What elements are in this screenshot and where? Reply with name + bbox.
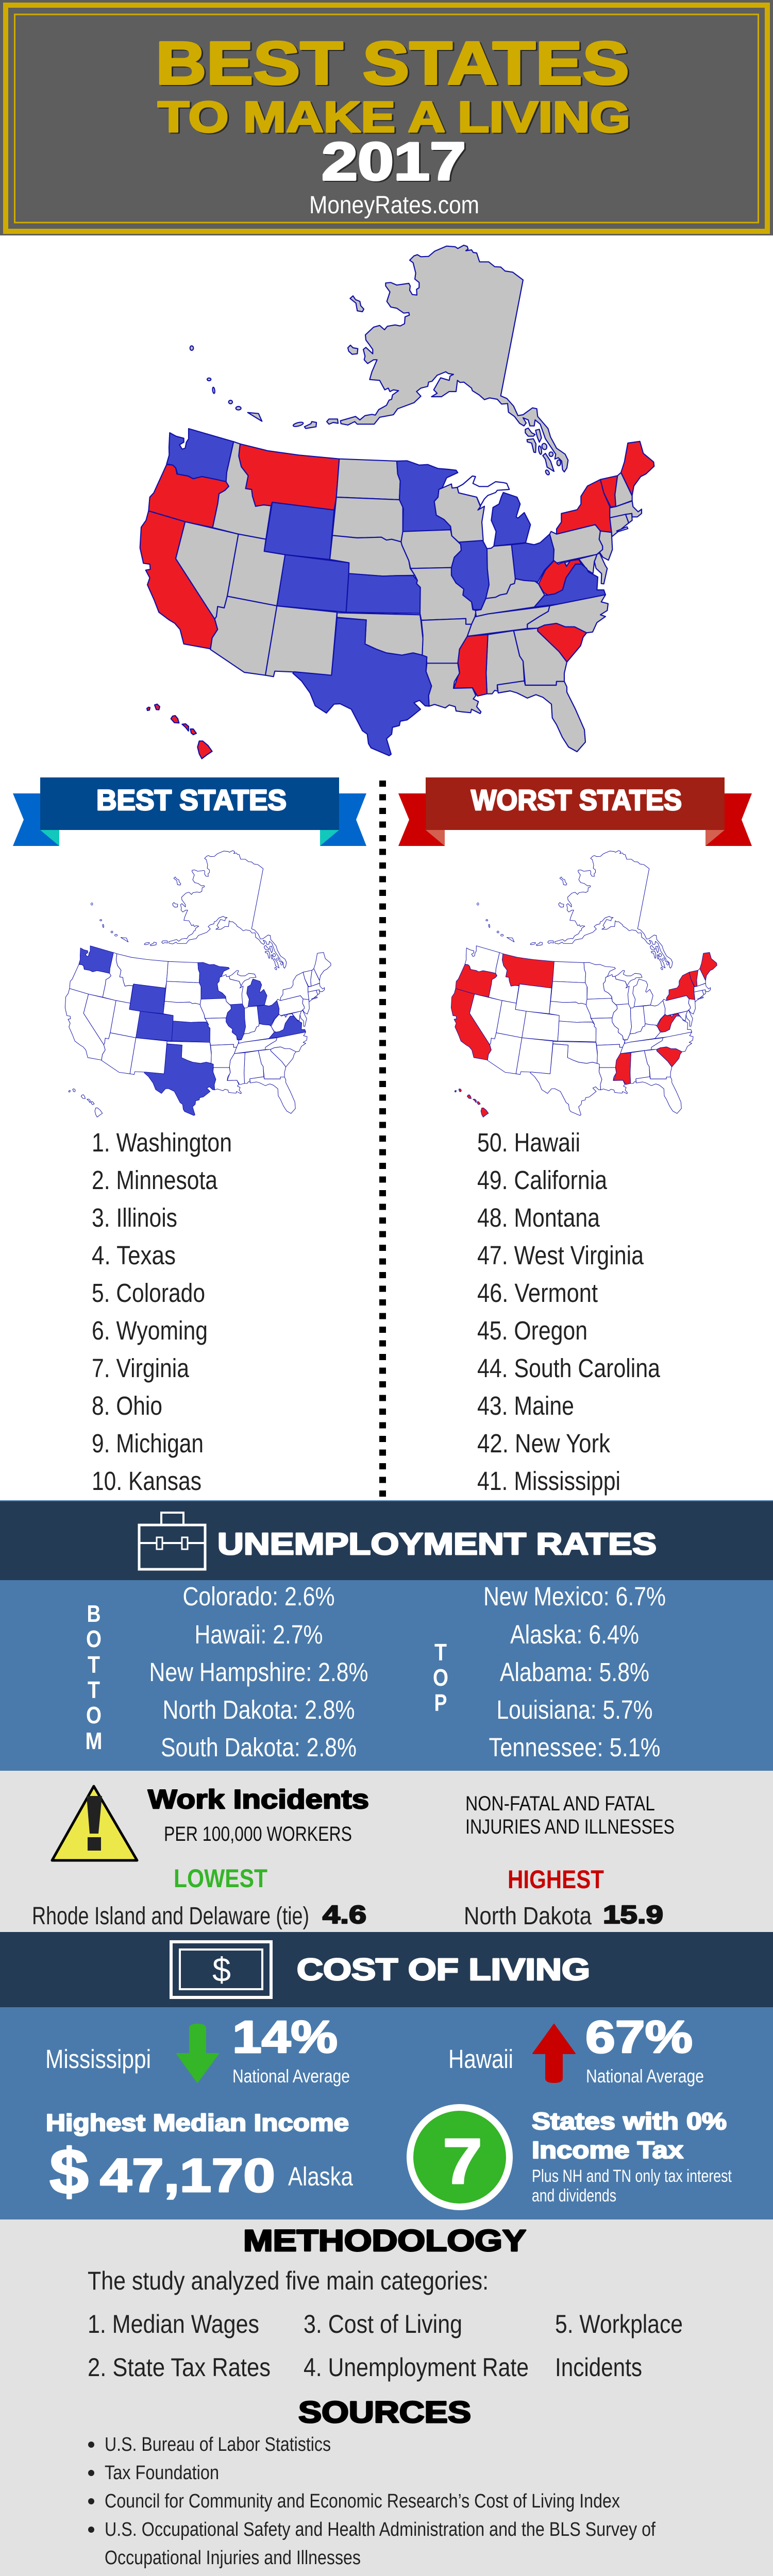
list: worst states: 44. South Carolina — [477, 1353, 661, 1383]
list: worst states: 45. Oregon — [477, 1316, 587, 1345]
lowest value: 4.6 — [323, 1901, 366, 1929]
main map of the United States — [140, 245, 654, 759]
heading: unemployment rates: UNEMPLOYMENT RATES — [217, 1527, 657, 1561]
list: lowest unemployment — [149, 1582, 368, 1762]
year: 2017 — [322, 132, 466, 192]
methodology categories: 4. Unemployment Rate — [304, 2353, 529, 2382]
list: worst states: 46. Vermont — [477, 1278, 598, 1308]
panel: unemployment lists — [0, 1580, 773, 1771]
stat: Hawaii: Hawaii — [448, 2044, 513, 2074]
list: lowest unemployment: Hawaii: 2.7% — [195, 1620, 323, 1649]
methodology categories: 1. Median Wages — [88, 2310, 259, 2338]
label: lowest: LOWEST — [174, 1864, 267, 1893]
subheading: per 100,000 workers: PER 100,000 WORKERS — [164, 1823, 352, 1845]
sources list: U.S. Occupational Safety and Health Administration and the BLS Survey of — [105, 2519, 656, 2540]
badge: 7 states: 7 — [443, 2126, 482, 2197]
icon: dollar bill — [171, 1942, 271, 1997]
list: worst states: 48. Montana — [477, 1203, 600, 1232]
heading: sources: SOURCES — [298, 2396, 471, 2429]
heading: cost of living: COST OF LIVING — [297, 1953, 590, 1987]
list: best states: 8. Ohio — [92, 1391, 162, 1420]
list: worst states: 50. Hawaii — [477, 1128, 580, 1157]
list: worst states: 43. Maine — [477, 1391, 574, 1420]
highest value: North Dakota — [464, 1903, 592, 1930]
small map: best states highlighted — [65, 851, 331, 1117]
list: highest unemployment: Alabama: 5.8% — [500, 1657, 649, 1687]
stat: Mississippi: Mississippi — [45, 2044, 151, 2074]
intro text: The study analyzed five main categories: — [88, 2266, 489, 2295]
list: best states: 9. Michigan — [92, 1429, 204, 1458]
text: states with 0% income tax: and dividends — [532, 2186, 616, 2206]
stat: highest median income: Alaska — [288, 2162, 354, 2191]
stat: highest median income: Highest Median Income — [46, 2109, 349, 2136]
list: best states: 4. Texas — [92, 1241, 176, 1270]
list: lowest unemployment: Colorado: 2.6% — [182, 1582, 335, 1611]
lowest value: Rhode Island and Delaware (tie) — [32, 1903, 309, 1930]
panel: cost of living stats — [0, 2007, 773, 2219]
vertical label: bottom: O — [86, 1702, 102, 1728]
list: lowest unemployment: New Hampshire: 2.8% — [149, 1657, 368, 1687]
icon: warning triangle — [52, 1786, 137, 1860]
list: best states: 3. Illinois — [92, 1203, 177, 1232]
icon: green down arrow — [177, 2024, 219, 2082]
vertical label: top — [433, 1639, 448, 1716]
heading: methodology: METHODOLOGY — [243, 2224, 526, 2258]
stat: highest median income: $ — [49, 2136, 89, 2208]
ribbon: best states — [13, 777, 366, 846]
note: non-fatal and fatal injuries: INJURIES AND ILLNESSES — [465, 1816, 675, 1838]
panel: methodology and sources — [0, 2219, 773, 2576]
note: non-fatal and fatal injuries — [465, 1792, 675, 1838]
caption: national average: National Average — [232, 2065, 350, 2087]
highest value — [464, 1901, 663, 1930]
list: worst states: 47. West Virginia — [477, 1241, 644, 1270]
highest value: 15.9 — [603, 1901, 663, 1929]
list: worst states: 42. New York — [477, 1429, 610, 1458]
vertical label: bottom: O — [86, 1625, 102, 1652]
list: best states — [92, 1128, 232, 1496]
methodology categories: 2. State Tax Rates — [88, 2353, 271, 2382]
sources list: U.S. Bureau of Labor Statistics — [105, 2434, 331, 2455]
section header: unemployment rates — [0, 1500, 773, 1580]
section header: cost of living — [0, 1932, 773, 2007]
vertical label: top: T — [434, 1639, 447, 1666]
list: best states: 6. Wyoming — [92, 1316, 208, 1345]
list: highest unemployment: Tennessee: 5.1% — [489, 1733, 661, 1762]
list: worst states — [477, 1128, 661, 1496]
site name: MoneyRates.com — [309, 192, 479, 219]
list: best states: 10. Kansas — [92, 1466, 201, 1496]
badge: 7 states — [407, 2104, 513, 2210]
methodology categories: Incidents — [555, 2353, 642, 2382]
ribbon label: worst states: WORST STATES — [471, 784, 682, 816]
dotted divider — [379, 781, 386, 1500]
heading: work incidents: Work Incidents — [148, 1785, 369, 1815]
stat: Hawaii — [448, 2011, 704, 2087]
header banner — [0, 0, 773, 235]
vertical label: bottom: B — [87, 1600, 101, 1627]
list: best states: 5. Colorado — [92, 1278, 205, 1308]
vertical label: bottom: T — [88, 1651, 100, 1678]
caption: national average: National Average — [586, 2065, 704, 2087]
vertical label: bottom: M — [86, 1727, 102, 1754]
stat: highest median income: 47,170 — [100, 2149, 275, 2202]
icon: dollar bill: $ — [212, 1951, 231, 1989]
list: highest unemployment: Alaska: 6.4% — [510, 1620, 639, 1649]
sources list — [88, 2434, 656, 2569]
list: highest unemployment: New Mexico: 6.7% — [483, 1582, 666, 1611]
note: non-fatal and fatal injuries: NON-FATAL AND FATAL — [465, 1792, 655, 1815]
sources list: Occupational Injuries and Illnesses — [105, 2547, 361, 2569]
list: best states: 1. Washington — [92, 1128, 232, 1157]
sources list: Council for Community and Economic Research’s Cost of Living Index — [105, 2490, 620, 2512]
methodology categories: 3. Cost of Living — [304, 2310, 462, 2338]
list: worst states: 41. Mississippi — [477, 1466, 620, 1496]
stat: highest median income — [46, 2109, 354, 2208]
methodology categories — [88, 2310, 683, 2382]
value: 67%: 67% — [585, 2011, 693, 2062]
value: 14%: 14% — [232, 2011, 338, 2062]
icon: red up arrow — [533, 2024, 575, 2082]
ribbon label: best states: BEST STATES — [96, 784, 287, 816]
small map: worst states highlighted — [451, 851, 717, 1117]
sources list: Tax Foundation — [105, 2462, 219, 2484]
title: to make a living: TO MAKE A LIVING — [158, 93, 630, 141]
label: highest: HIGHEST — [508, 1865, 604, 1894]
list: highest unemployment: Louisiana: 5.7% — [497, 1695, 652, 1724]
vertical label: bottom: T — [88, 1676, 100, 1703]
list: lowest unemployment: South Dakota: 2.8% — [161, 1733, 357, 1762]
text: states with 0% income tax — [532, 2108, 732, 2206]
panel: work incidents — [0, 1771, 773, 1932]
vertical label: top: P — [434, 1689, 447, 1716]
list: best states: 2. Minnesota — [92, 1165, 218, 1195]
icon: briefcase — [139, 1513, 205, 1569]
text: states with 0% income tax: States with 0% — [532, 2108, 727, 2134]
list: best states: 7. Virginia — [92, 1353, 190, 1383]
title: best states: BEST STATES — [156, 29, 629, 97]
methodology categories: 5. Workplace — [555, 2310, 683, 2338]
vertical label: bottom — [86, 1600, 102, 1754]
stat: Mississippi — [45, 2011, 350, 2087]
list: lowest unemployment: North Dakota: 2.8% — [163, 1695, 355, 1724]
list: worst states: 49. California — [477, 1165, 608, 1195]
list: highest unemployment — [483, 1582, 666, 1762]
text: states with 0% income tax: Income Tax — [532, 2137, 683, 2163]
ribbon: worst states — [398, 777, 752, 846]
vertical label: top: O — [433, 1664, 448, 1691]
